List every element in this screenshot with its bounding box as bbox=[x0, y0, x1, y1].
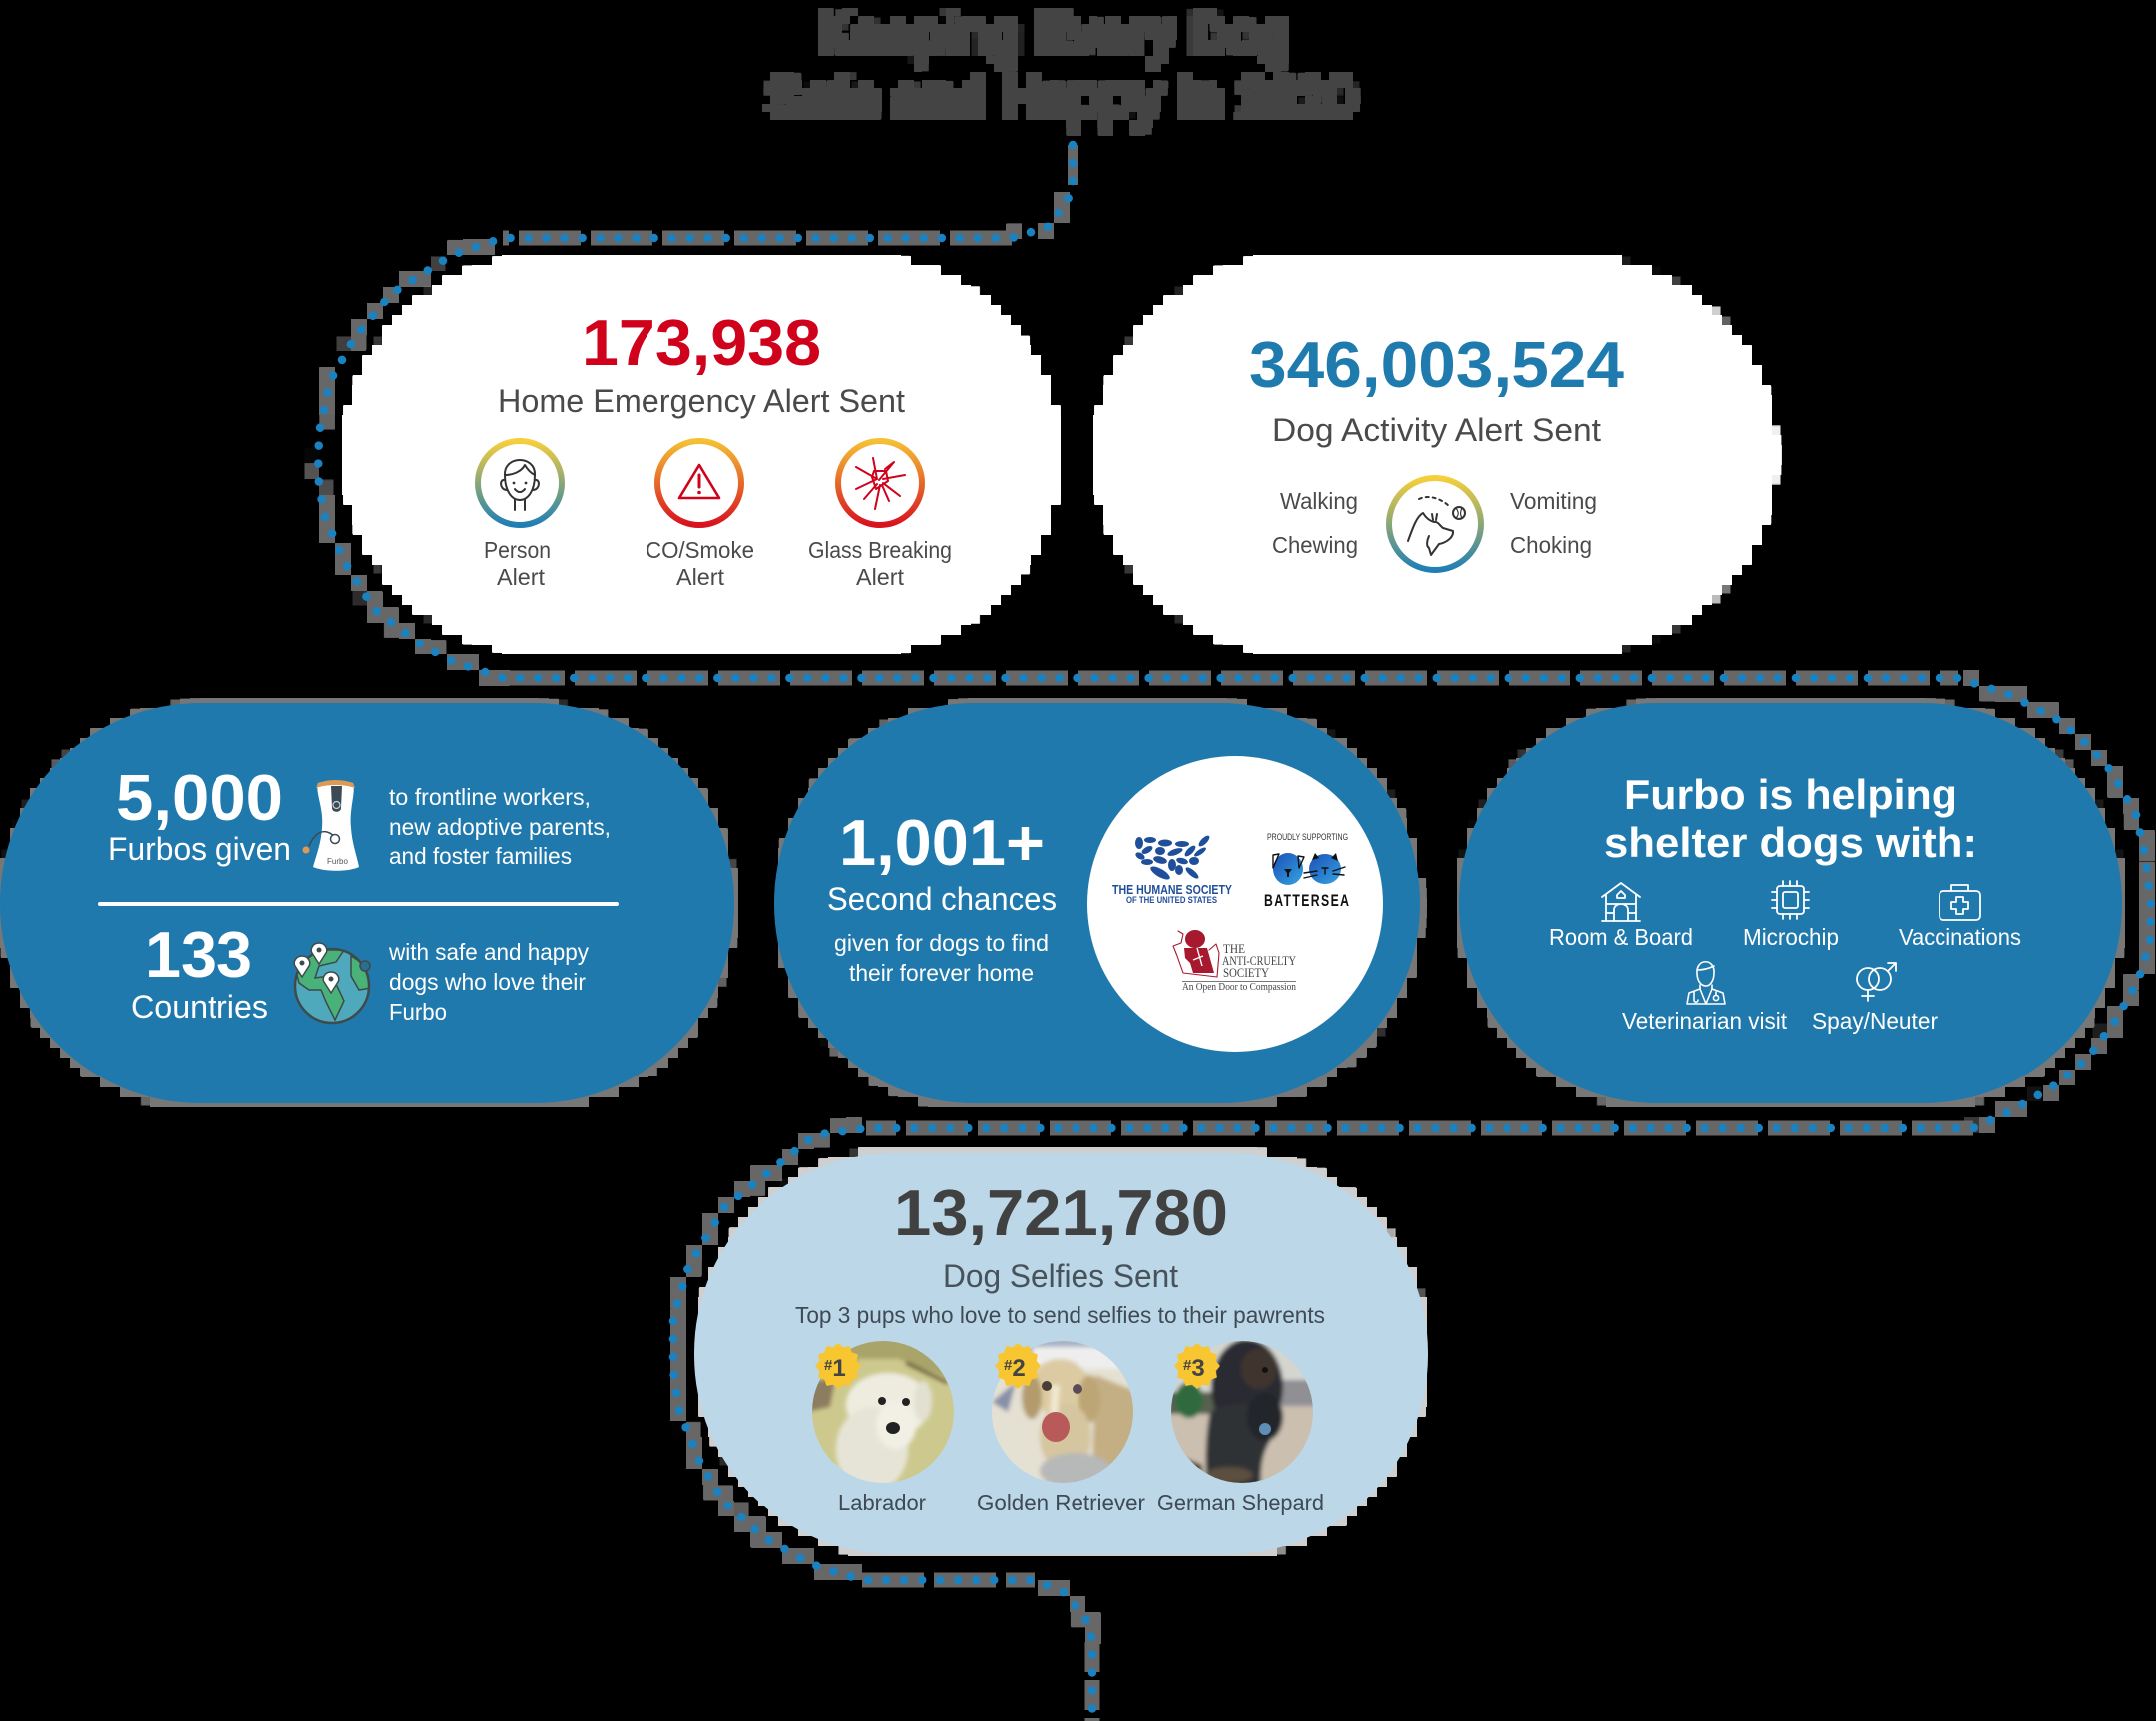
logo: anti-cruelty society bbox=[1173, 930, 1296, 993]
stat: 1,001+ second chances bbox=[827, 806, 1057, 917]
icon: glass breaking alert bbox=[838, 441, 922, 525]
activity labels: Chewing bbox=[1272, 532, 1358, 558]
label: co/smoke alert: CO/Smoke bbox=[646, 537, 754, 563]
badge: #2: # bbox=[1004, 1357, 1013, 1374]
dotted connector path bbox=[318, 145, 2151, 1721]
heading: furbo is helping bbox=[1604, 771, 1977, 866]
icon: spay neuter symbol bbox=[1857, 963, 1896, 1001]
breed labels bbox=[838, 1490, 1324, 1515]
partner logos circle bbox=[1087, 756, 1383, 1052]
activity labels: Choking bbox=[1510, 532, 1592, 558]
heading: furbo is helping: shelter dogs with: bbox=[1604, 819, 1977, 866]
second chances description bbox=[834, 930, 1049, 986]
icon: globe with pins bbox=[294, 943, 371, 1023]
title bbox=[767, 2, 1356, 131]
heading: home emergency alert: Home Emergency Alert Sent bbox=[498, 383, 905, 419]
icon: furbo device bbox=[303, 780, 359, 871]
second chances description: their forever home bbox=[849, 960, 1034, 986]
furbos description bbox=[389, 784, 611, 869]
shelter labels row 1: Vaccinations bbox=[1899, 924, 2021, 950]
activity labels: Vomiting bbox=[1510, 488, 1597, 514]
breed labels: Golden Retriever bbox=[977, 1490, 1145, 1515]
panel: furbos given and countries bbox=[0, 702, 736, 1109]
label: co/smoke alert: Alert bbox=[676, 564, 725, 590]
label: co/smoke alert bbox=[646, 537, 754, 590]
title: Safe and Happy in 2020 bbox=[767, 66, 1356, 131]
icon: person alert bbox=[478, 441, 562, 525]
photo: labrador bbox=[812, 1341, 954, 1483]
badge: #1: 1 bbox=[832, 1355, 846, 1382]
furbos description: new adoptive parents, bbox=[389, 814, 611, 840]
panel: dog selfies bbox=[694, 1148, 1430, 1558]
stat: 5,000 furbos given: 5,000 bbox=[116, 761, 283, 834]
activity labels: Walking bbox=[1280, 488, 1358, 514]
icon: microchip bbox=[1772, 881, 1809, 919]
logo: humane society: OF THE UNITED STATES bbox=[1126, 895, 1217, 905]
heading: dog activity alert: Dog Activity Alert Sent bbox=[1272, 412, 1601, 448]
badge: #1: # bbox=[824, 1357, 833, 1374]
badge: #2 bbox=[996, 1344, 1040, 1388]
logo: humane society bbox=[1112, 834, 1232, 905]
icon: room and board bbox=[1602, 883, 1640, 921]
badge: #1 bbox=[816, 1344, 860, 1388]
logo: battersea bbox=[1264, 832, 1349, 911]
icon: dog with ball bbox=[1389, 478, 1481, 570]
icon: furbo device: Furbo bbox=[327, 857, 348, 866]
stat: 5,000 furbos given bbox=[108, 761, 291, 867]
label: person alert bbox=[484, 537, 551, 590]
shelter labels row 1: Room & Board bbox=[1549, 924, 1693, 950]
stat: 1,001+ second chances: 1,001+ bbox=[839, 806, 1045, 879]
shelter labels row 2 bbox=[1622, 1008, 1938, 1034]
label: glass breaking alert: Alert bbox=[856, 564, 905, 590]
countries description: with safe and happy bbox=[388, 939, 589, 965]
shelter labels row 1: Microchip bbox=[1743, 924, 1839, 950]
logo: anti-cruelty society: SOCIETY bbox=[1223, 965, 1270, 980]
stat: 13,721,780: 13,721,780 bbox=[894, 1176, 1228, 1249]
panel: dog activity alerts bbox=[1093, 255, 1778, 654]
icon: veterinarian bbox=[1687, 962, 1725, 1004]
photo: golden retriever bbox=[992, 1341, 1133, 1483]
logo: battersea: BATTERSEA bbox=[1264, 892, 1349, 911]
heading: furbo is helping: Furbo is helping bbox=[1624, 771, 1957, 818]
icon: CO smoke alert bbox=[657, 441, 741, 525]
stat: 133 countries: Countries bbox=[131, 989, 268, 1025]
shelter labels row 2: Veterinarian visit bbox=[1622, 1008, 1788, 1034]
activity labels bbox=[1272, 488, 1597, 558]
stat: 5,000 furbos given: Furbos given bbox=[108, 831, 291, 867]
panel: second chances bbox=[774, 702, 1423, 1109]
second chances description: given for dogs to find bbox=[834, 930, 1049, 956]
badge: #2: 2 bbox=[1012, 1355, 1026, 1382]
stat: 133 countries: 133 bbox=[145, 918, 252, 991]
logo: battersea: PROUDLY SUPPORTING bbox=[1267, 832, 1348, 842]
badge: #3: 3 bbox=[1191, 1355, 1205, 1382]
heading: dog selfies sent: Dog Selfies Sent bbox=[943, 1258, 1178, 1294]
panel: home emergency alerts bbox=[342, 255, 1062, 654]
badge: #3: # bbox=[1183, 1357, 1192, 1374]
label: person alert: Alert bbox=[497, 564, 546, 590]
shelter labels row 1 bbox=[1549, 924, 2021, 950]
title: Keeping Every Dog bbox=[816, 2, 1291, 67]
stat: 133 countries bbox=[131, 918, 268, 1025]
logo: anti-cruelty society: An Open Door to Compassion bbox=[1182, 982, 1296, 993]
stat: 1,001+ second chances: Second chances bbox=[827, 881, 1057, 917]
icon: vaccinations kit bbox=[1940, 885, 1980, 920]
logo: anti-cruelty society: THE bbox=[1223, 941, 1245, 956]
shelter labels row 2: Spay/Neuter bbox=[1812, 1008, 1938, 1034]
furbos description: to frontline workers, bbox=[389, 784, 591, 810]
stat: 173,938: 173,938 bbox=[582, 306, 821, 379]
panel: shelter dogs bbox=[1457, 702, 2125, 1109]
label: glass breaking alert: Glass Breaking bbox=[808, 537, 952, 563]
countries description: Furbo bbox=[389, 999, 447, 1025]
breed labels: German Shepard bbox=[1157, 1490, 1324, 1515]
furbos description: and foster families bbox=[389, 843, 572, 869]
stat: 346,003,524: 346,003,524 bbox=[1249, 328, 1624, 401]
breed labels: Labrador bbox=[838, 1490, 926, 1515]
logo: anti-cruelty society: ANTI-CRUELTY bbox=[1222, 953, 1296, 968]
countries description: dogs who love their bbox=[389, 969, 586, 995]
logo: humane society: THE HUMANE SOCIETY bbox=[1112, 882, 1232, 897]
subheading: top 3 pups: Top 3 pups who love to send selfies to their pawrents bbox=[795, 1302, 1325, 1328]
label: glass breaking alert bbox=[808, 537, 952, 590]
label: person alert: Person bbox=[484, 537, 551, 563]
countries description bbox=[388, 939, 589, 1025]
photo: german shepard bbox=[1171, 1341, 1313, 1483]
badge: #3 bbox=[1175, 1344, 1219, 1388]
